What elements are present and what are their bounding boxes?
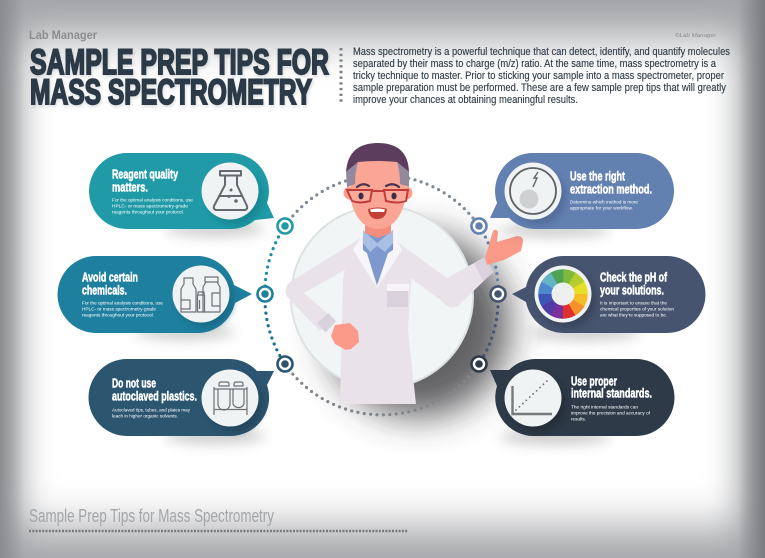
icon: pH colour wheel xyxy=(534,266,596,328)
heading xyxy=(570,170,652,196)
body text xyxy=(600,300,674,318)
eyes xyxy=(358,193,397,199)
node dark teal xyxy=(278,356,292,372)
body text: reagents throughout your protocol. xyxy=(112,210,184,216)
intro paragraph: separated by their mass to charge (m/z) ratio. At the same time, mass spectrometry is a xyxy=(353,58,716,70)
heading: your solutions. xyxy=(600,284,664,298)
body text: results. xyxy=(571,416,586,422)
body text xyxy=(82,300,163,318)
body text: Determine which method is more xyxy=(570,200,638,206)
neck xyxy=(365,222,391,238)
heading xyxy=(112,168,178,194)
credit: Lab Manager: ©Lab Manager xyxy=(675,32,716,39)
body text: leach in higher organic solvents. xyxy=(112,414,178,420)
character: scientist xyxy=(285,143,523,404)
heading: Do not use xyxy=(112,376,156,390)
left arm xyxy=(285,236,364,337)
face xyxy=(351,158,405,229)
eyebrows xyxy=(357,184,399,187)
body text: appropriate for your workflow. xyxy=(570,206,633,212)
heading: extraction method. xyxy=(570,182,652,196)
heading: Check the pH of xyxy=(600,270,668,284)
panel: reagent quality xyxy=(89,153,274,237)
body text: For the optimal analysis conditions, use xyxy=(112,198,193,204)
central circle shadow xyxy=(326,233,510,417)
central circle xyxy=(291,206,473,388)
footer dotted rule xyxy=(29,530,408,532)
body text xyxy=(571,404,651,422)
node charcoal xyxy=(472,356,486,372)
body text xyxy=(112,408,191,420)
panel: pH xyxy=(512,256,705,341)
heading: Reagent quality xyxy=(112,168,178,182)
intro paragraph: improve your chances at obtaining meaningful results. xyxy=(353,94,578,106)
node blue xyxy=(258,286,272,302)
body text: chemical properties of your solution xyxy=(600,306,674,312)
ears xyxy=(344,186,412,200)
heading: Use proper xyxy=(571,374,617,388)
body text: HPLC- or mass spectrometry-grade xyxy=(112,204,188,210)
title: SAMPLE PREP TIPS FOR xyxy=(30,43,329,82)
heading: Avoid certain xyxy=(82,270,138,284)
body text xyxy=(112,198,193,216)
title: MASS SPECTROMETRY xyxy=(30,73,312,112)
heading xyxy=(571,374,652,400)
shirt and tie area xyxy=(363,232,393,285)
panel: internal standards xyxy=(490,359,674,445)
body text: improve the precision and accuracy of xyxy=(571,410,651,416)
title xyxy=(30,43,330,114)
glasses xyxy=(347,190,408,202)
title: SAMPLE PREP TIPS FOR xyxy=(31,45,330,84)
intro paragraph: sample preparation must be performed. These are a few sample prep tips that will greatly xyxy=(353,82,727,94)
hands xyxy=(331,230,523,350)
footer title: Sample Prep Tips for Mass Spectrometry xyxy=(29,506,274,526)
heading: chemicals. xyxy=(82,284,127,298)
body text: For the optimal analysis conditions, use xyxy=(82,300,163,306)
icon: test tubes xyxy=(202,370,263,432)
coat body xyxy=(340,238,416,404)
icon: calibration plot xyxy=(504,370,566,432)
heading: matters. xyxy=(112,180,148,194)
panel: extraction method xyxy=(490,153,674,238)
body text: HPLC- or mass spectrometry-grade xyxy=(82,306,156,312)
logo: Lab Manager: Lab Manager xyxy=(29,30,97,42)
heading: autoclaved plastics. xyxy=(112,390,197,404)
body text: are what they're supposed to be. xyxy=(600,312,667,318)
panel: autoclaved plastics xyxy=(88,359,274,444)
title: MASS SPECTROMETRY xyxy=(31,75,313,114)
lapels xyxy=(353,236,409,291)
icon: bottles xyxy=(172,266,234,328)
body text: The right internal standards can xyxy=(571,404,638,410)
body text: It is important to ensure that the xyxy=(600,300,667,306)
icon: flask xyxy=(202,162,263,225)
node markers xyxy=(258,218,506,372)
intro paragraph xyxy=(353,46,730,106)
mouth xyxy=(368,208,387,219)
hair xyxy=(346,143,409,187)
body text xyxy=(570,200,638,212)
dotted ring xyxy=(265,175,498,415)
panel: avoid certain chemicals xyxy=(58,256,252,340)
dotted divider xyxy=(340,48,342,102)
heading xyxy=(600,270,668,298)
body text: reagents throughout your protocol. xyxy=(82,312,154,318)
coat pocket xyxy=(387,291,408,307)
heading: internal standards. xyxy=(571,386,652,400)
heading: Use the right xyxy=(570,170,626,184)
heading xyxy=(82,270,138,298)
right arm xyxy=(392,238,494,308)
intro paragraph: tricky technique to master. Prior to sticking your sample into a mass spectrometer, proper xyxy=(353,70,724,82)
node slate xyxy=(490,286,506,302)
icon: centrifuge dial xyxy=(504,162,566,225)
node teal xyxy=(278,218,292,234)
heading xyxy=(112,376,197,404)
body text: Autoclaved tips, tubes, and plates may xyxy=(112,408,191,414)
node periwinkle xyxy=(472,218,486,234)
